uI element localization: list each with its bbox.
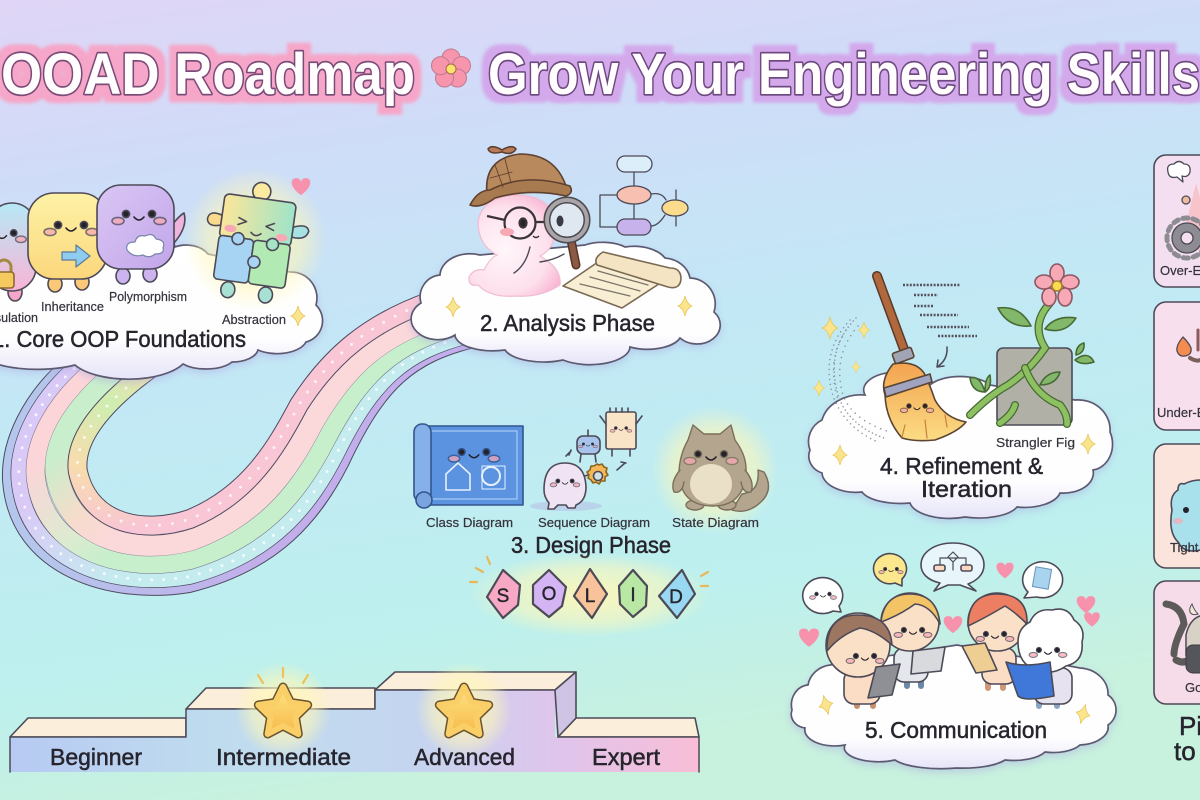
- character: encapsulation: [0, 203, 40, 301]
- icon: sparkle left: [833, 445, 847, 465]
- hearts: [799, 563, 1100, 647]
- icon: sparkle right: [678, 296, 692, 316]
- card: tight coupling: [1154, 444, 1200, 568]
- card: over-engineering: [1154, 155, 1200, 287]
- icon: scroll: [563, 252, 681, 308]
- icon: glasses and magnifier: [487, 200, 587, 265]
- icon: sparkle left: [446, 297, 460, 317]
- label: strangler fig: Strangler Fig: [996, 435, 1075, 450]
- cloud 5: [791, 645, 1116, 769]
- icon: title flower: [432, 49, 470, 87]
- heading: refinement and iteration: Iteration: [921, 476, 1012, 502]
- people: [826, 593, 1083, 706]
- cloud 1: [0, 216, 323, 379]
- heading: refinement and iteration: [880, 453, 1043, 502]
- icon: god object monster: [1166, 604, 1200, 673]
- icon: star advanced: [416, 662, 512, 758]
- title text: left part: OOAD Roadmap: [1, 42, 415, 107]
- gem: O: [533, 570, 566, 617]
- heading: design phase: 3. Design Phase: [511, 532, 671, 558]
- SOLID gems: [468, 553, 712, 637]
- icon: strangler fig vine and flower: [970, 264, 1094, 424]
- character: inheritance: [28, 193, 107, 292]
- icon: sparkle left: [817, 694, 835, 716]
- panel: 4. refinement and iteration: [808, 264, 1113, 518]
- person: white cloud hair: [1006, 609, 1083, 706]
- gem: I: [619, 570, 647, 617]
- speech bubbles: [803, 543, 1063, 614]
- icon: state diagram monster: [651, 406, 779, 534]
- gem: S: [487, 570, 520, 618]
- character: abstraction puzzle: [183, 168, 327, 312]
- icon: detective hat: [470, 147, 571, 206]
- icon: sparkle right: [1074, 703, 1092, 725]
- icon: code text above broom: [903, 285, 977, 336]
- dust trail: [829, 318, 890, 442]
- stairs front: [10, 690, 699, 772]
- character: detective: [469, 147, 587, 296]
- label: class diagram: Class Diagram: [426, 516, 513, 530]
- gem: O: O: [542, 584, 556, 605]
- label: beginner: Beginner: [50, 744, 142, 770]
- panel: 5. communication: [791, 543, 1116, 769]
- heading: pitfalls to avoid: [1174, 711, 1200, 766]
- character: broom: [877, 276, 966, 441]
- label: advanced: Advanced: [414, 744, 515, 770]
- icon: stone wall: [997, 348, 1072, 425]
- panel: 3. design phase: [414, 406, 779, 637]
- icon: sparkle: [291, 306, 305, 326]
- icon: blueprint class diagram: [414, 424, 523, 508]
- icon: sequence diagram characters: [530, 408, 642, 511]
- gem: L: [574, 569, 607, 618]
- stairs top surfaces: [10, 672, 699, 737]
- card: god object: [1154, 581, 1200, 704]
- title: [1, 42, 1200, 107]
- icon: star intermediate: [235, 662, 331, 758]
- rainbow road: [7, 288, 495, 591]
- heading: analysis phase: 2. Analysis Phase: [480, 310, 655, 336]
- heading: refinement and iteration: 4. Refinement &: [880, 453, 1043, 479]
- icon: sparkles: [813, 317, 870, 396]
- panel: skill level stairs: [10, 662, 699, 772]
- label: state diagram: State Diagram: [672, 516, 759, 530]
- panel: 2. analysis phase: [411, 147, 720, 365]
- icon: heart: [292, 178, 310, 195]
- character: polymorphism: [97, 185, 185, 284]
- label: abstraction: Abstraction: [222, 313, 286, 327]
- label: expert: Expert: [592, 744, 661, 770]
- gem: D: [659, 570, 695, 618]
- card: under-engineering: [1154, 302, 1200, 430]
- icon: over-engineering gear and smoke: [1167, 162, 1200, 258]
- label: inheritance: Inheritance: [41, 300, 104, 314]
- gem: S: S: [497, 586, 509, 607]
- gem: I: I: [630, 585, 636, 606]
- stairs riser: [555, 672, 576, 737]
- icon: cyan blob: [1171, 480, 1200, 551]
- arrow: code to broom: [937, 347, 947, 367]
- cloud 4: [808, 372, 1113, 518]
- panel: pitfalls: [1154, 155, 1200, 766]
- face on blob: [1173, 507, 1189, 524]
- person: red hair: [962, 593, 1027, 688]
- panel: 1. core OOP foundations: [0, 168, 327, 379]
- gem: L: L: [585, 586, 595, 607]
- person: brown hair: [826, 613, 900, 706]
- heading: communication: 5. Communication: [865, 717, 1047, 743]
- label: intermediate: Intermediate: [216, 744, 351, 770]
- gem: D: D: [669, 587, 683, 608]
- person: blond: [881, 593, 945, 686]
- icon: torch flame: [1177, 330, 1200, 361]
- cloud 2: [411, 242, 720, 365]
- label: polymorphism: Polymorphism: [109, 290, 187, 304]
- icon: sparkle right: [1081, 434, 1095, 454]
- icon: flowchart: [600, 156, 688, 235]
- label: sequence diagram: Sequence Diagram: [538, 516, 650, 530]
